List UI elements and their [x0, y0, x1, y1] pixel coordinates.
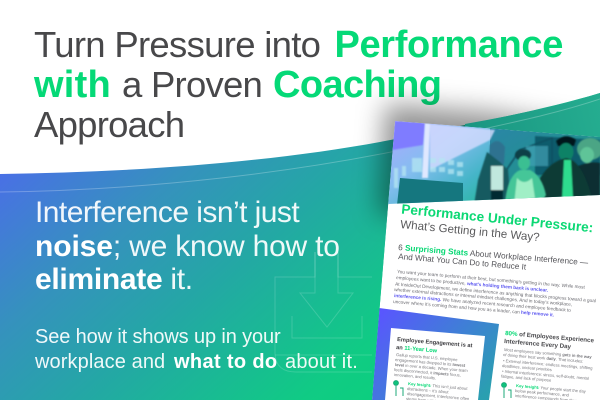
- subheading: noise; we know how to: [35, 230, 340, 263]
- title: a Proven: [122, 64, 262, 105]
- watermark icon: download arrow: [275, 252, 372, 372]
- card heading: an 11-Year Low: [396, 345, 438, 354]
- card body: distractions – it’s about: [407, 386, 450, 395]
- title: Performance: [334, 24, 563, 66]
- document intro text: [393, 269, 596, 318]
- photo: pillar: [422, 123, 430, 178]
- title: Coaching: [273, 64, 441, 106]
- right stat column: Key Insight: Your people start the day: [516, 383, 587, 394]
- photo: purple panel: [392, 121, 425, 150]
- band highlight line: [465, 99, 600, 133]
- right stat column: fatigue, and lack of purpose: [501, 374, 552, 383]
- right stat column: of doing their best work daily. That includes:: [503, 352, 584, 364]
- blue panel: [372, 308, 499, 400]
- document heading: What’s Getting in the Way?: [400, 218, 541, 244]
- gradient background band: [0, 93, 600, 400]
- call to action text: what to do: [173, 351, 277, 373]
- document intro text: whether external distractions or internal mindset challenges. And in today’s workplace,: [394, 287, 572, 307]
- photo: [388, 121, 600, 204]
- right stat column: • External interference: endless meetings, shifting: [503, 358, 593, 371]
- subheading: eliminate it.: [35, 263, 193, 296]
- call to action text: about it.: [285, 351, 358, 373]
- band section behind the document top: [465, 93, 600, 150]
- photo: monitor: [397, 178, 463, 205]
- right stat column: deadlines, unclear priorities: [502, 363, 552, 372]
- call to action text: See how it shows up in your: [35, 326, 281, 348]
- document intro text: uncover where it’s coming from and how you as a leader, can help remove it.: [393, 299, 554, 318]
- right stat column: [501, 330, 595, 400]
- card body: Key Insight: This isn’t just about: [408, 381, 469, 391]
- photo: frames on right: [535, 136, 600, 175]
- card heading: Employee Engagement is at: [397, 337, 473, 349]
- title: [33, 24, 563, 145]
- document intro text: employees want to be productive, what’s holding them back is unclear.: [396, 275, 548, 293]
- card body: level in over a decade. When your team: [395, 362, 468, 373]
- document intro text: You want your team to perform at their best, but something’s getting in the way. While most: [397, 269, 586, 290]
- title: Turn Pressure into: [34, 24, 320, 65]
- photo: window glow: [430, 124, 495, 170]
- right stat column: • Internal interference: stress, self-doubt, mental: [502, 369, 589, 381]
- document intro text: At InsideOut Development, we define interference as anything that blocks progress toward a goal: [395, 282, 596, 303]
- subheading: Interference isn’t just: [35, 196, 300, 229]
- subheading: [35, 196, 340, 296]
- document preview: [372, 115, 600, 400]
- document shadow: [378, 104, 600, 220]
- right stat column: below peak performance, and: [515, 388, 570, 398]
- right stat column: 80% of Employees Experience: [505, 330, 595, 344]
- photo: window grid: [394, 158, 463, 188]
- photo: person three: [539, 135, 592, 198]
- card body: Gallup reports that U.S. employee: [396, 352, 459, 362]
- right stat column: Interference Every Day: [504, 338, 572, 351]
- photo: person one: [474, 141, 511, 205]
- icon: key insight right: [502, 383, 511, 398]
- title: Approach: [34, 104, 184, 145]
- card body: feels disconnected, it impacts focus,: [394, 367, 461, 378]
- white stat card: [385, 328, 485, 400]
- card body: engagement has dropped to its lowest: [395, 357, 466, 368]
- card body: innovation, and results.: [394, 372, 436, 381]
- photo: person two: [505, 149, 546, 205]
- call to action text: [34, 326, 358, 373]
- document intro text: interference is rising. We have analyzed recent research and employee feedback to: [394, 293, 571, 313]
- photo: person four: [572, 138, 600, 196]
- right stat column: Most employees say something gets in the way: [504, 347, 593, 359]
- document subheading: And What You Can Do to Reduce It: [398, 252, 527, 272]
- document page: [372, 121, 600, 400]
- document subheading: 6 Surprising Stats About Workplace Interference —: [398, 243, 589, 267]
- card body: [394, 352, 470, 400]
- title: with: [33, 64, 111, 106]
- icon: key insight: [394, 381, 403, 396]
- document heading: Performance Under Pressure:: [401, 202, 594, 235]
- call to action text: workplace and: [34, 351, 165, 373]
